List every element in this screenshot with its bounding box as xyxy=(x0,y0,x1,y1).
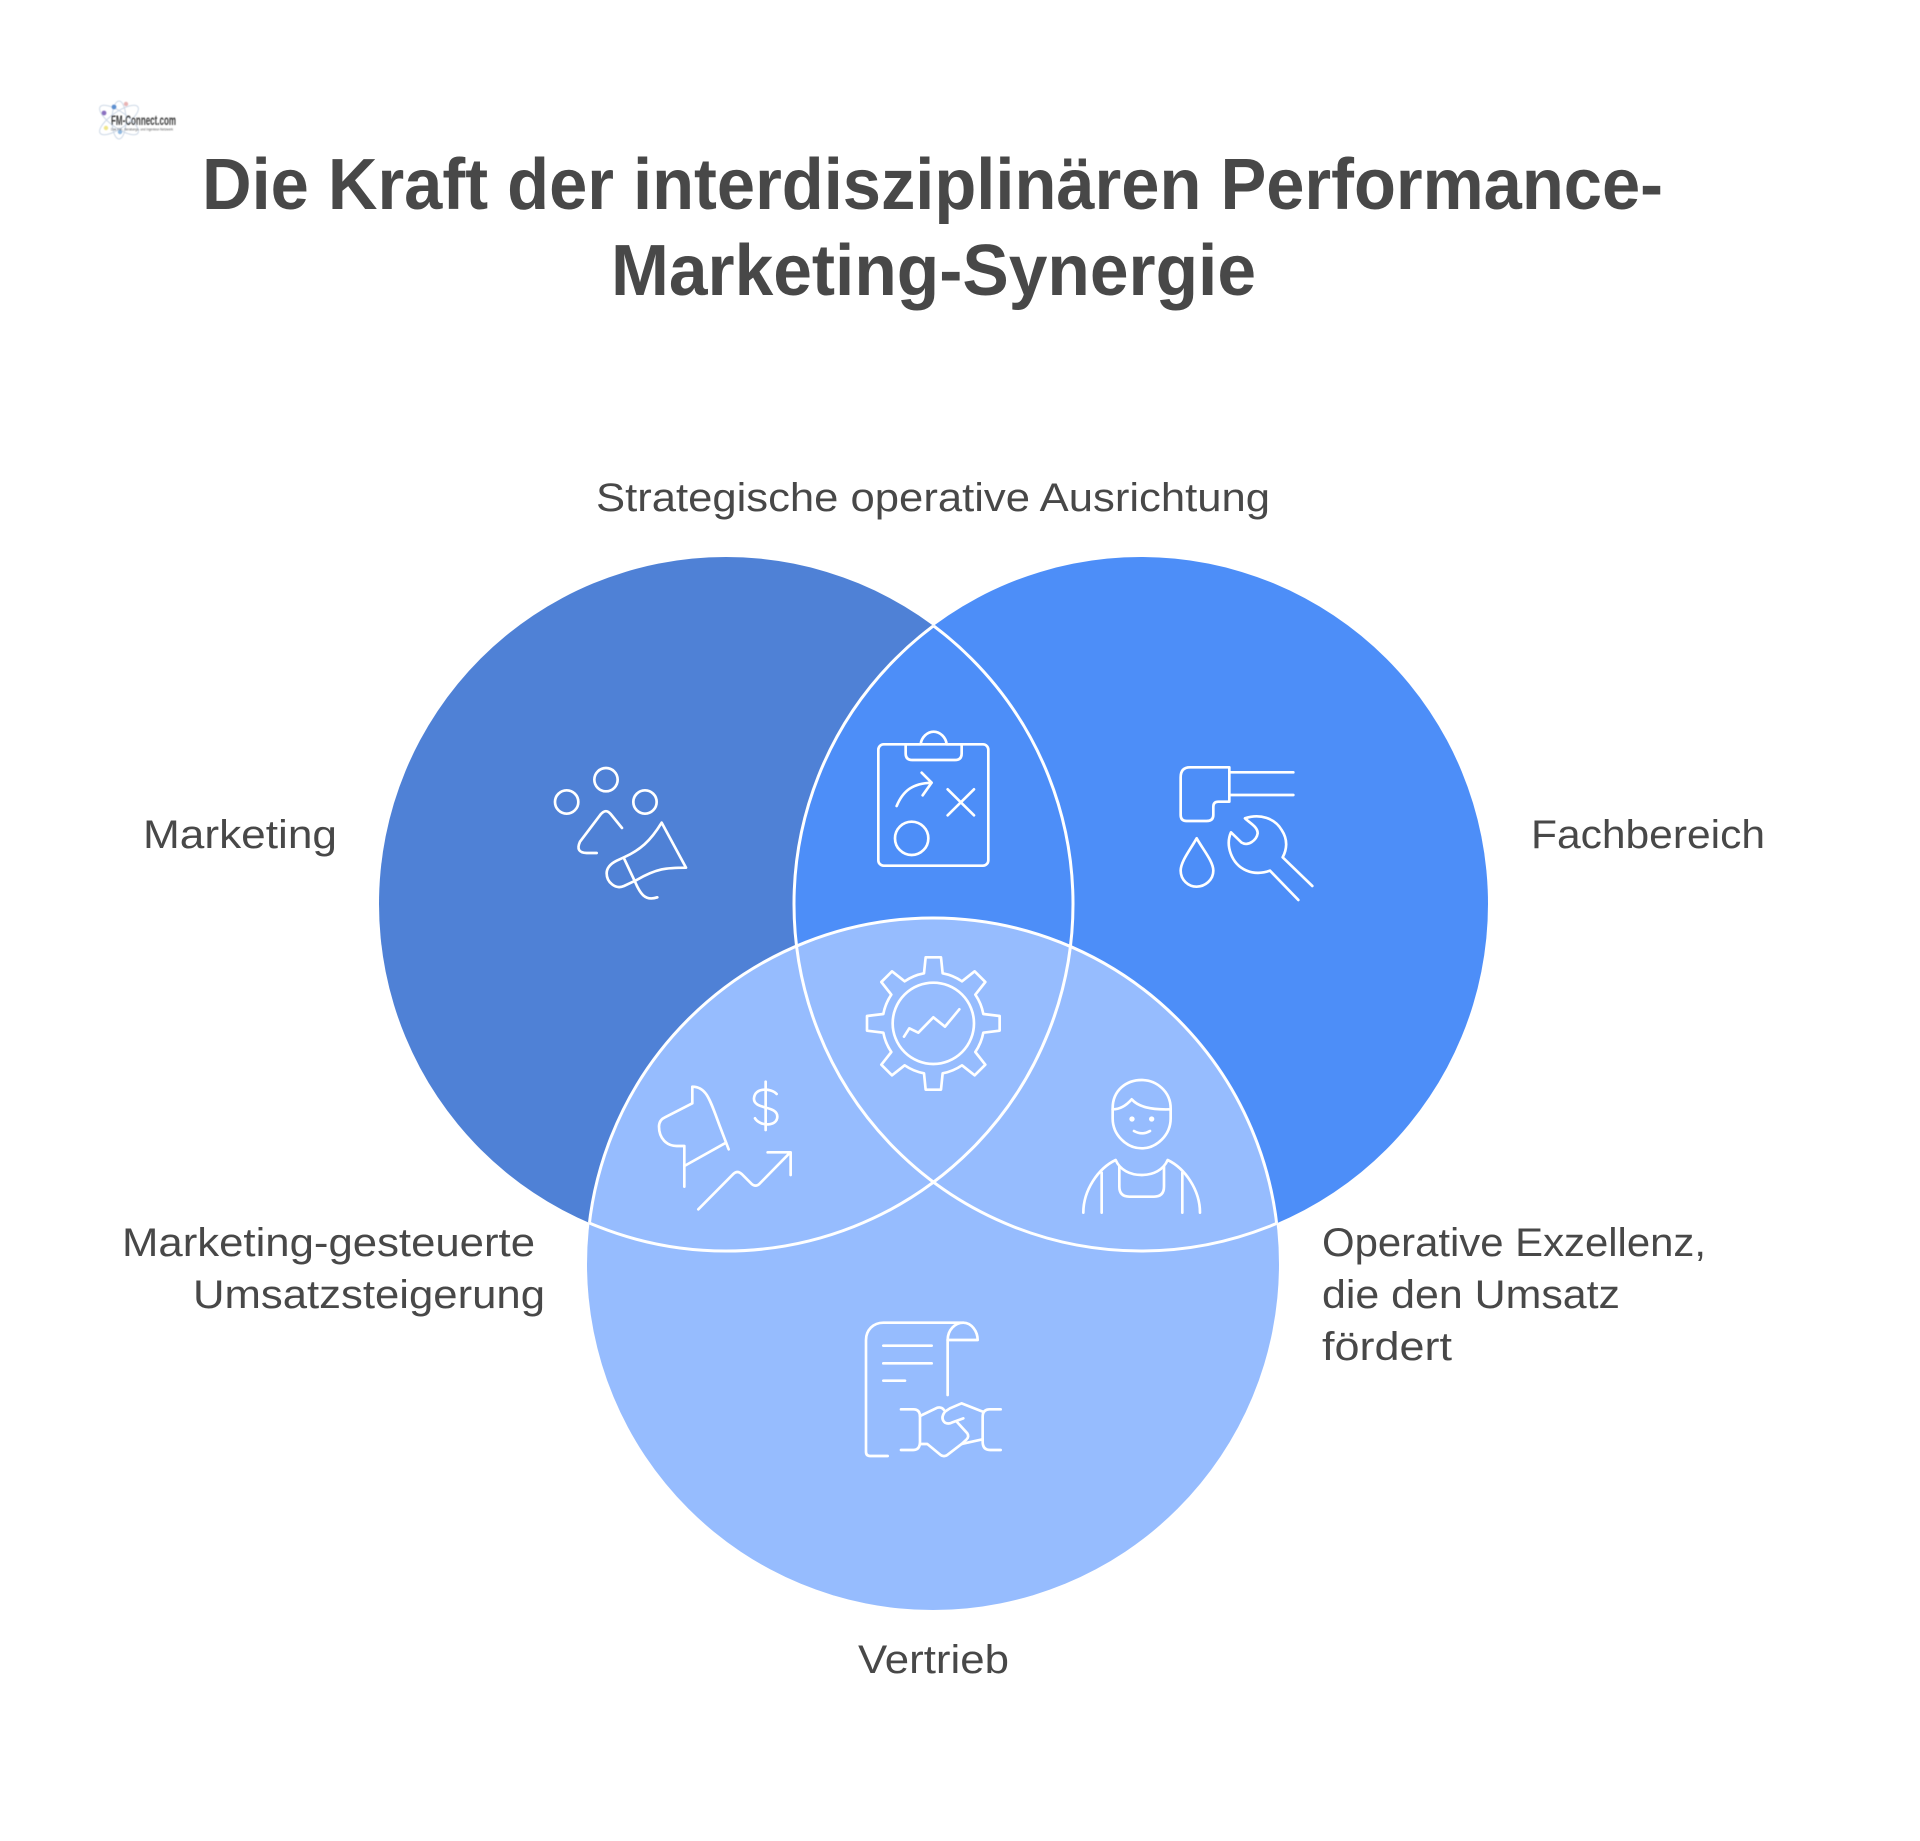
label: Marketing-gesteuerte Umsatzsteigerung xyxy=(122,1221,545,1317)
title: Die Kraft der interdisziplinären Performance- xyxy=(202,145,1663,225)
icon: gear with chart xyxy=(867,957,1000,1090)
icon: strategy clipboard xyxy=(878,732,988,866)
title: Marketing-Synergie xyxy=(611,231,1256,311)
label: Vertrieb: Vertrieb xyxy=(858,1638,1009,1682)
overlap outlines xyxy=(588,625,1278,1252)
label: Marketing-gesteuerte Umsatzsteigerung: Marketing-gesteuerte xyxy=(122,1221,535,1265)
icon: worker xyxy=(1083,1080,1200,1213)
circle: Marketing xyxy=(379,557,1073,1251)
circle: Fachbereich xyxy=(794,557,1488,1251)
icon: people and megaphone xyxy=(555,768,686,898)
icon: contract and handshake xyxy=(866,1323,1001,1456)
label: Operative Exzellenz: die den Umsatz xyxy=(1322,1273,1620,1317)
label: Operative Exzellenz: Operative Exzellenz, xyxy=(1322,1221,1706,1265)
label: Marketing: Marketing xyxy=(143,813,337,857)
label: Operative Exzellenz: fördert xyxy=(1322,1325,1452,1369)
icon: megaphone and revenue growth xyxy=(659,1082,791,1209)
label: Marketing-gesteuerte Umsatzsteigerung: Umsatzsteigerung xyxy=(193,1273,545,1317)
logo: FM-Connect: FM-Connect.com xyxy=(111,112,176,128)
logo: FM-Connect xyxy=(96,100,176,140)
label: Operative Exzellenz xyxy=(1322,1221,1706,1369)
icon: faucet, drop and wrench xyxy=(1181,767,1312,900)
venn diagram xyxy=(379,557,1488,1610)
logo: FM-Connect: Das FM-, Beratungs- und Ingenieur-Netzwerk xyxy=(111,128,173,132)
label: Fachbereich: Fachbereich xyxy=(1531,813,1765,857)
title xyxy=(202,145,1663,311)
circle: Vertrieb xyxy=(587,918,1279,1610)
label: Strategische operative Ausrichtung: Strategische operative Ausrichtung xyxy=(596,476,1270,520)
